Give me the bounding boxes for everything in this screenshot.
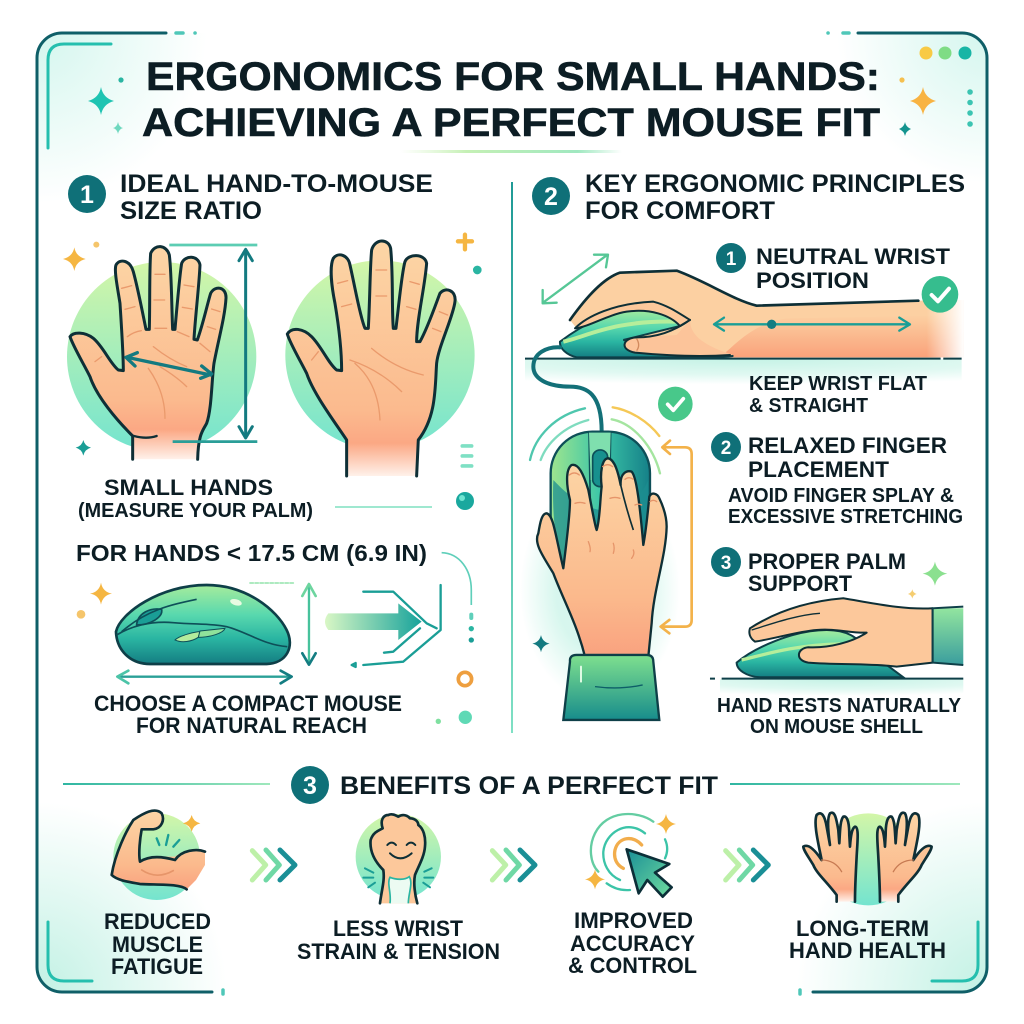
title: ERGONOMICS FOR SMALL HANDS: bbox=[146, 55, 880, 99]
section 1 badge: 1 bbox=[80, 181, 94, 209]
keep wrist caption: KEEP WRIST FLAT bbox=[749, 373, 927, 395]
mouse body bbox=[116, 585, 290, 664]
benefit 1 label: FATIGUE bbox=[111, 954, 203, 979]
title bbox=[142, 55, 880, 145]
principle 3 bbox=[711, 547, 906, 596]
left hand with measurements bbox=[67, 245, 257, 459]
table shadow bbox=[525, 359, 962, 384]
benefit 2 label: LESS WRIST bbox=[333, 916, 464, 941]
benefit 2 label bbox=[297, 916, 500, 964]
palm caption: HAND RESTS NATURALLY bbox=[717, 695, 962, 717]
principle 1: NEUTRAL WRIST bbox=[756, 244, 951, 269]
section 3 heading: BENEFITS OF A PERFECT FIT bbox=[340, 772, 718, 800]
wrist alignment arrow bbox=[714, 318, 910, 331]
principle 1: 1 bbox=[726, 249, 737, 270]
side view hand on mouse bbox=[560, 271, 964, 358]
reach arrow bbox=[325, 585, 441, 667]
principle 2: RELAXED FINGER bbox=[748, 433, 947, 458]
check badge bbox=[922, 276, 958, 313]
section 2 heading bbox=[585, 170, 965, 225]
palm caption: ON MOUSE SHELL bbox=[750, 716, 923, 738]
small hands caption bbox=[78, 475, 313, 522]
benefit 4 label: HAND HEALTH bbox=[789, 938, 946, 963]
arrow chevrons bbox=[726, 850, 768, 880]
hand illustrations bbox=[63, 235, 482, 476]
icon: flexed arm bbox=[112, 811, 205, 900]
small hands caption: (MEASURE YOUR PALM) bbox=[78, 500, 313, 522]
small check badge bbox=[658, 387, 693, 421]
benefit 3 label bbox=[568, 908, 697, 978]
section 2 heading: KEY ERGONOMIC PRINCIPLES bbox=[585, 170, 965, 198]
title underline bbox=[400, 150, 622, 153]
benefit 4 label bbox=[789, 916, 946, 963]
finger caption: AVOID FINGER SPLAY & bbox=[728, 485, 954, 507]
keep wrist caption bbox=[749, 373, 927, 417]
decorative curve, dots, sparkle bbox=[77, 553, 474, 724]
panel: section 1 hand-to-mouse ratio bbox=[63, 170, 482, 738]
orange bracket arrow bbox=[661, 441, 692, 633]
top view hand on mouse bbox=[520, 432, 680, 703]
icon: accuracy cursor bbox=[585, 814, 676, 897]
dimension arrows bbox=[117, 583, 316, 683]
arrow chevrons bbox=[492, 850, 535, 880]
benefit 1 label: REDUCED bbox=[104, 909, 211, 934]
right hand bbox=[285, 241, 475, 476]
principle 3: 3 bbox=[721, 553, 731, 574]
sleeve bbox=[563, 655, 659, 720]
principle 3: SUPPORT bbox=[748, 571, 853, 596]
title: ACHIEVING A PERFECT MOUSE FIT bbox=[142, 101, 880, 145]
benefit 3 label: & CONTROL bbox=[568, 953, 697, 978]
benefit 1 label bbox=[104, 909, 211, 979]
benefit icons left bbox=[112, 811, 441, 903]
mouse caption: FOR NATURAL REACH bbox=[136, 713, 367, 738]
benefit 4 label: LONG-TERM bbox=[796, 916, 929, 941]
small hands caption: SMALL HANDS bbox=[104, 475, 273, 500]
section 1 badge bbox=[68, 175, 106, 213]
principle 1 bbox=[716, 243, 951, 293]
principle illustrations bbox=[520, 255, 964, 720]
principle 3: PROPER PALM bbox=[748, 549, 906, 574]
sparkles and dots bbox=[63, 235, 482, 466]
benefit 3 label: ACCURACY bbox=[570, 931, 695, 956]
mouse cable bbox=[533, 347, 602, 432]
palm support illustration bbox=[710, 598, 963, 696]
benefit 3 label: IMPROVED bbox=[574, 908, 693, 933]
principle 2: PLACEMENT bbox=[748, 457, 890, 482]
section 2 heading: FOR COMFORT bbox=[585, 197, 775, 225]
section 1 heading: SIZE RATIO bbox=[120, 197, 262, 225]
section 3 badge: 3 bbox=[303, 772, 317, 800]
section 3 badge bbox=[291, 766, 329, 804]
principle 2: 2 bbox=[721, 438, 731, 459]
palm caption bbox=[717, 695, 962, 738]
motion arcs bbox=[530, 407, 660, 473]
sparkles bbox=[908, 562, 947, 599]
benefit icons right bbox=[492, 813, 932, 905]
green double arrow bbox=[543, 255, 608, 303]
principle 1: POSITION bbox=[756, 268, 869, 293]
section 1 heading: IDEAL HAND-TO-MOUSE bbox=[120, 170, 433, 198]
panel: section 2 key principles bbox=[520, 170, 965, 738]
mouse caption bbox=[94, 691, 402, 738]
section 1 heading bbox=[120, 170, 433, 225]
icon: relaxed wrist bbox=[356, 814, 441, 903]
finger caption: EXCESSIVE STRETCHING bbox=[728, 506, 963, 528]
mouse cord bbox=[63, 640, 120, 653]
finger caption bbox=[728, 485, 963, 528]
sparkles around title bbox=[88, 77, 970, 136]
table line bbox=[525, 356, 962, 362]
divider between sections bbox=[511, 182, 513, 733]
hand size rule: FOR HANDS < 17.5 CM (6.9 IN) bbox=[76, 540, 427, 566]
benefit 2 label: STRAIN & TENSION bbox=[297, 939, 500, 964]
benefit 1 label: MUSCLE bbox=[112, 932, 203, 957]
mouse caption: CHOOSE A COMPACT MOUSE bbox=[94, 691, 402, 716]
keep wrist caption: & STRAIGHT bbox=[749, 395, 868, 417]
section 2 badge: 2 bbox=[544, 183, 558, 211]
compact mouse illustration bbox=[63, 553, 474, 724]
arrow chevrons bbox=[252, 850, 295, 880]
principle 2 bbox=[711, 432, 947, 482]
section 2 badge bbox=[532, 177, 570, 215]
teal sparkle bbox=[532, 635, 550, 652]
icon: two healthy hands bbox=[803, 813, 932, 905]
section 3 heading rules bbox=[63, 783, 960, 785]
panel: section 3 benefits bbox=[63, 766, 960, 979]
decorative dots top right bbox=[920, 46, 972, 60]
teal dot with line bbox=[335, 492, 474, 510]
